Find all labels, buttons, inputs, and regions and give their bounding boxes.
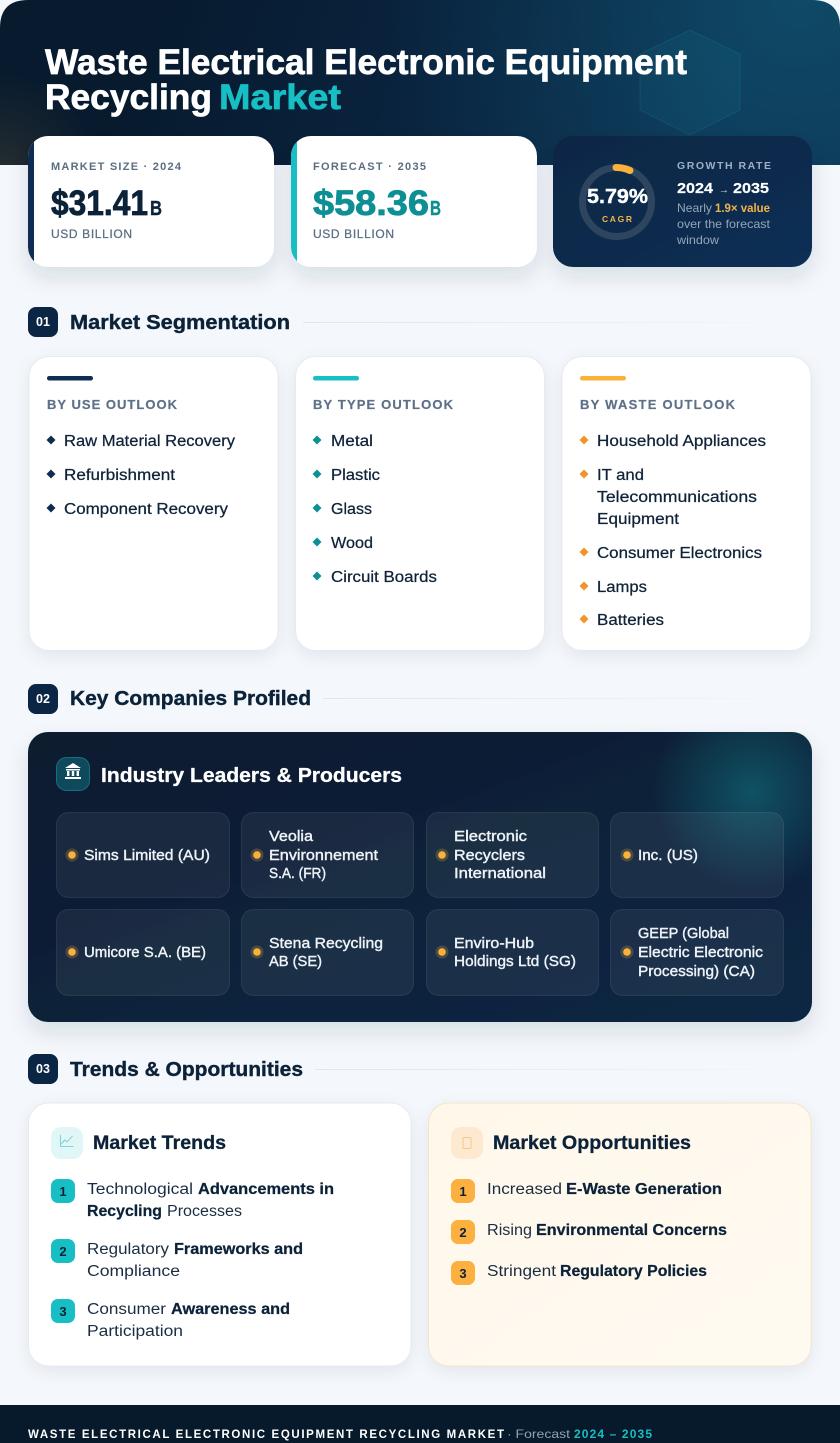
opportunity 1 (451, 1179, 722, 1203)
title (45, 43, 687, 117)
panel: by type outlook: BY TYPE OUTLOOK (313, 397, 454, 412)
list: type outlook items: Wood (331, 535, 373, 552)
company: Inc.: Inc. (US) (638, 848, 698, 864)
stat card: market size 2024: MARKET SIZE · 2024 (51, 161, 182, 173)
stat card: forecast 2035: B (430, 198, 441, 220)
stat card: market size 2024: $31.41 (51, 184, 148, 223)
list: waste outlook items: Telecommunications (597, 489, 757, 506)
growth rate text: window (676, 233, 719, 247)
list: waste outlook items: IT and (597, 467, 644, 484)
growth rate text (676, 160, 771, 247)
company: Umicore (56, 910, 230, 996)
company: Enviro-Hub: Holdings Ltd (SG) (454, 954, 576, 970)
footer: WASTE ELECTRICAL ELECTRONIC EQUIPMENT RECYCLING MARKET (28, 1429, 504, 1441)
panel: by use outlook (29, 356, 278, 650)
company: Enviro-Hub (426, 910, 598, 996)
company: Electronic Recyclers International (426, 812, 598, 898)
company: Veolia: Environnement (269, 848, 378, 864)
trend 3: Consumer (87, 1301, 166, 1318)
growth rate text: 1.9× value (715, 201, 770, 215)
panel: by type outlook (296, 356, 544, 650)
opportunity 1: Increased (487, 1181, 562, 1198)
growth rate text: → (719, 184, 729, 196)
footer: · Forecast (507, 1427, 571, 1441)
company: Enviro-Hub: Enviro-Hub (454, 936, 534, 952)
list: type outlook items: Circuit Boards (331, 569, 437, 586)
icon: hexagon decoration (640, 30, 740, 135)
stat card: market size 2024 (28, 136, 274, 267)
section heading: market segmentation: 01 (36, 315, 50, 329)
stat card: growth rate (553, 136, 812, 267)
list: waste outlook items: Lamps (597, 579, 647, 596)
icon: opportunity placeholder (451, 1127, 483, 1159)
trend 1 (51, 1179, 334, 1220)
trend 1: 1 (59, 1184, 67, 1199)
stat card: forecast 2035: USD BILLION (313, 227, 394, 241)
chart: CAGR ring: CAGR (602, 214, 632, 224)
section heading: market segmentation (28, 307, 812, 337)
panel: by waste outlook: BY WASTE OUTLOOK (580, 397, 736, 412)
heading: Industry Leaders & Producers (101, 764, 402, 787)
trend 3: Awareness and (171, 1301, 290, 1318)
opportunity 2: Environmental Concerns (536, 1222, 727, 1239)
trend 1: Advancements in (198, 1181, 334, 1198)
trend 2: Regulatory (87, 1241, 169, 1258)
company: Veolia (242, 812, 414, 898)
panel: industry leaders (28, 732, 812, 1022)
section heading: key companies: 02 (36, 692, 50, 706)
opportunity 3: Regulatory Policies (560, 1263, 707, 1280)
company: Sims Limited: Sims Limited (AU) (84, 848, 210, 864)
trend 2 (51, 1239, 303, 1280)
trend 3: Participation (87, 1323, 183, 1340)
company: GEEP (610, 910, 784, 996)
icon: bank (56, 758, 90, 790)
opportunity 2: 2 (459, 1225, 467, 1240)
company: Inc. (610, 812, 784, 898)
list: use outlook items: Refurbishment (64, 467, 176, 484)
list: waste outlook items: Consumer Electronics (597, 545, 762, 562)
company: Stena Recycling: AB (SE) (269, 954, 322, 970)
opportunity 3 (451, 1261, 707, 1285)
title: Waste Electrical Electronic Equipment (45, 43, 687, 82)
company: Veolia: Veolia (269, 829, 314, 845)
company: Electronic Recyclers International: Electronic (454, 829, 527, 845)
list: use outlook items: Raw Material Recovery (64, 433, 235, 450)
section heading: trends and opportunities (28, 1054, 812, 1084)
trend 3 (51, 1299, 290, 1340)
company: Stena Recycling: Stena Recycling (269, 936, 383, 952)
panel: by waste outlook (562, 356, 811, 650)
stat card: market size 2024: B (150, 198, 162, 220)
heading: Market Opportunities (493, 1132, 691, 1154)
panel: by use outlook: BY USE OUTLOOK (47, 397, 178, 412)
company: Sims Limited (56, 812, 230, 898)
opportunity 1: 1 (459, 1184, 467, 1199)
trend 2: Compliance (87, 1263, 180, 1280)
list: type outlook items: Metal (331, 433, 373, 450)
list: use outlook items: Component Recovery (64, 501, 228, 518)
panel: market trends (28, 1103, 411, 1366)
growth rate text: over the forecast (677, 217, 771, 231)
section heading: key companies: Key Companies Profiled (70, 687, 311, 710)
company: Stena Recycling (242, 910, 414, 996)
list: type outlook items (312, 433, 437, 586)
growth rate text: 2024 (677, 181, 713, 197)
heading: Market Trends (93, 1132, 226, 1154)
icon: chart (51, 1127, 83, 1159)
opportunity 2 (451, 1220, 727, 1244)
list: use outlook items (46, 433, 235, 518)
chart: CAGR ring: 5.79% (587, 186, 648, 208)
title: Market (219, 78, 341, 117)
title: Recycling (45, 78, 212, 117)
header banner (0, 0, 840, 165)
section heading: trends and opportunities: 03 (36, 1062, 50, 1076)
company: Umicore: Umicore S.A. (BE) (84, 945, 206, 961)
list: waste outlook items: Batteries (597, 612, 664, 629)
stat card: market size 2024: USD BILLION (51, 227, 132, 241)
opportunity 3: 3 (459, 1266, 467, 1281)
panel: market opportunities (428, 1103, 811, 1366)
footer: 2024 – 2035 (574, 1427, 652, 1441)
list: waste outlook items: Household Appliances (597, 433, 766, 450)
trend 1: Recycling (87, 1203, 162, 1220)
trend 2: 2 (59, 1244, 67, 1259)
section heading: key companies (28, 684, 812, 714)
section heading: market segmentation: Market Segmentation (70, 311, 290, 334)
company: Electronic Recyclers International: International (454, 866, 546, 882)
trend 3: 3 (59, 1304, 67, 1319)
list: waste outlook items: Equipment (597, 511, 680, 528)
stat card: forecast 2035: FORECAST · 2035 (313, 161, 426, 173)
opportunity 2: Rising (487, 1222, 532, 1239)
growth rate text: GROWTH RATE (677, 160, 771, 172)
trend 2: Frameworks and (174, 1241, 303, 1258)
company: Electronic Recyclers International: Recyclers (454, 848, 525, 864)
stat card: forecast 2035 (291, 136, 537, 267)
company: GEEP: Electric Electronic (638, 945, 763, 961)
company: GEEP: Processing) (CA) (638, 964, 755, 980)
list: waste outlook items (580, 433, 766, 629)
chart: CAGR ring (582, 168, 652, 236)
company: Veolia: S.A. (FR) (269, 866, 326, 882)
list: type outlook items: Plastic (331, 467, 380, 484)
opportunity 1: E-Waste Generation (566, 1181, 722, 1198)
company: GEEP: GEEP (Global (638, 926, 729, 942)
stat card: forecast 2035: $58.36 (313, 184, 429, 223)
trend 1: Technological (87, 1181, 193, 1198)
list: type outlook items: Glass (331, 501, 372, 518)
section heading: trends and opportunities: Trends & Opportunities (70, 1058, 303, 1081)
trend 1: Processes (167, 1203, 242, 1220)
opportunity 3: Stringent (487, 1263, 557, 1280)
growth rate text: Nearly (677, 201, 712, 215)
growth rate text: 2035 (733, 181, 769, 197)
footer (0, 1405, 840, 1443)
